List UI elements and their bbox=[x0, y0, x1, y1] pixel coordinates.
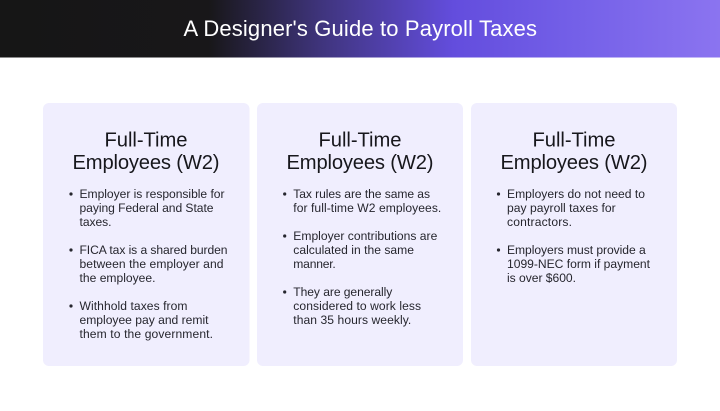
bullet: 1099-NEC form: is over $600. bbox=[507, 271, 576, 285]
bullet: same tax rules: Tax rules are the same as bbox=[293, 187, 430, 201]
heading: column 1 bbox=[72, 129, 220, 174]
bullet: withhold taxes: employee pay and remit bbox=[80, 313, 209, 327]
bullet: withhold taxes: Withhold taxes from bbox=[80, 299, 188, 313]
bullet: under 35 hours bbox=[283, 285, 421, 327]
heading: column 2 bbox=[286, 129, 434, 174]
bullet: employer responsibility: Employer is responsible for bbox=[80, 187, 224, 201]
bullet: employer contributions: Employer contributions are bbox=[293, 229, 438, 243]
bullet: employer responsibility: taxes. bbox=[80, 215, 112, 229]
heading: column 2: Full-Time bbox=[318, 129, 402, 151]
bullet: withhold taxes: them to the government. bbox=[80, 327, 213, 341]
bullet: no payroll taxes: pay payroll taxes for bbox=[507, 201, 616, 215]
bullet: FICA tax: FICA tax is a shared burden bbox=[80, 243, 228, 257]
heading: column 3 bbox=[500, 129, 648, 174]
bullet: FICA tax: between the employer and bbox=[80, 257, 224, 271]
heading: column 2: Employees (W2) bbox=[286, 152, 434, 174]
bullet: no payroll taxes: Employers do not need to bbox=[507, 187, 645, 201]
bullet: employer contributions bbox=[283, 229, 438, 271]
heading: column 1: Full-Time bbox=[104, 129, 188, 151]
bullet: no payroll taxes bbox=[497, 187, 645, 229]
bullet: under 35 hours: They are generally bbox=[293, 285, 393, 299]
bullet: 1099-NEC form bbox=[497, 243, 651, 285]
bullet: employer responsibility bbox=[69, 187, 225, 229]
bullet: employer contributions: manner. bbox=[293, 257, 336, 271]
heading: column 3: Full-Time bbox=[532, 129, 616, 151]
bullet: withhold taxes bbox=[69, 299, 213, 341]
bullet: same tax rules bbox=[283, 187, 441, 215]
header banner bbox=[0, 0, 720, 58]
bullet: employer responsibility: paying Federal and State bbox=[80, 201, 214, 215]
bullet: same tax rules: for full-time W2 employees. bbox=[293, 201, 441, 215]
bullet: employer contributions: calculated in the same bbox=[293, 243, 414, 257]
bullet: FICA tax: the employee. bbox=[80, 271, 156, 285]
heading: column 1: Employees (W2) bbox=[72, 152, 220, 174]
bullet: under 35 hours: than 35 hours weekly. bbox=[293, 313, 411, 327]
bullet: FICA tax bbox=[69, 243, 228, 285]
bullet: under 35 hours: considered to work less bbox=[293, 299, 421, 313]
bullet: no payroll taxes: contractors. bbox=[507, 215, 572, 229]
panel: column 2 bbox=[257, 103, 463, 366]
panel: column 1 bbox=[43, 103, 250, 366]
bullet: 1099-NEC form: Employers must provide a bbox=[507, 243, 646, 257]
bullet: 1099-NEC form: 1099-NEC form if payment bbox=[507, 257, 651, 271]
heading: column 3: Employees (W2) bbox=[500, 152, 648, 174]
panel: column 3 bbox=[471, 103, 677, 366]
title: A Designer's Guide to Payroll Taxes bbox=[184, 16, 537, 41]
